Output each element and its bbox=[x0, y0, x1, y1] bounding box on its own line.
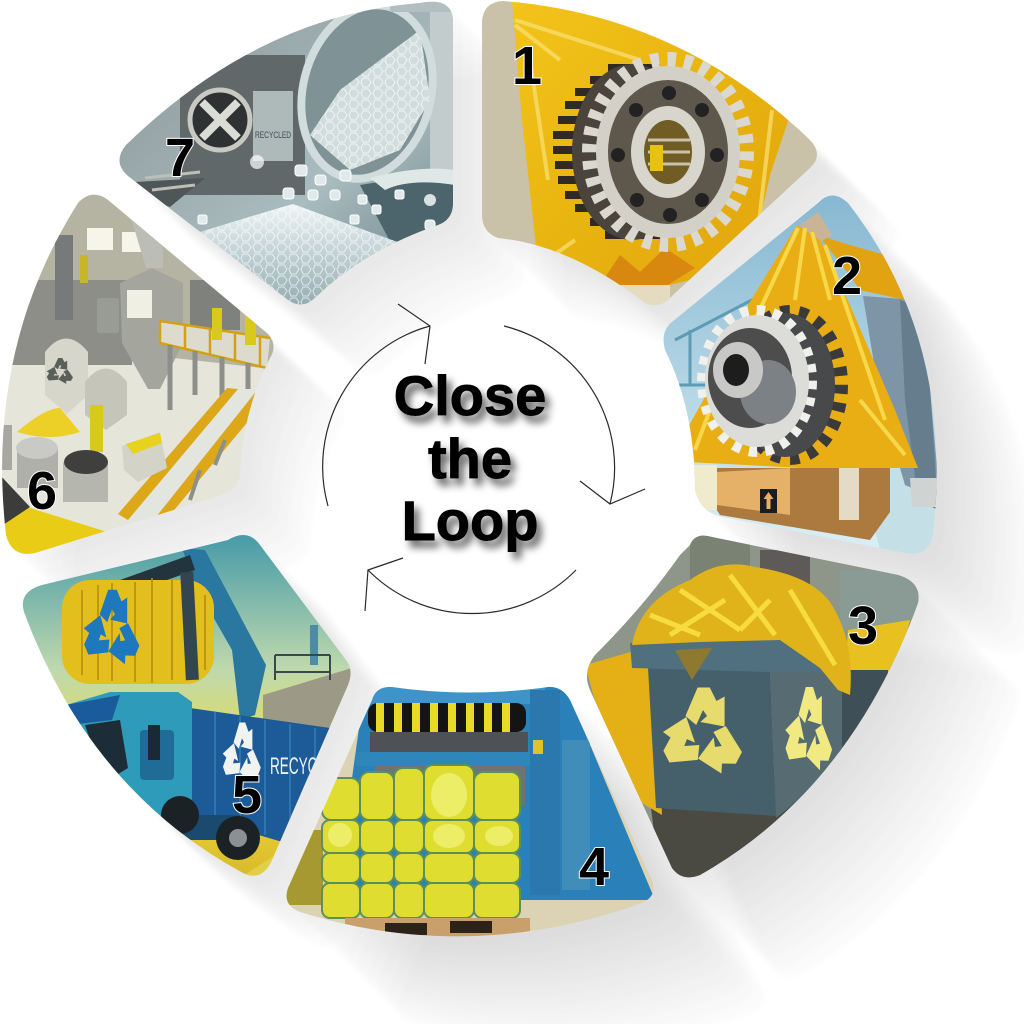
right dark area under jar bbox=[360, 170, 455, 260]
pallet bbox=[345, 918, 530, 936]
segment 2: worker wrapping gear bbox=[660, 190, 950, 560]
wheel bbox=[190, 90, 250, 150]
pellet pile bbox=[200, 204, 420, 310]
yellow bag bbox=[682, 225, 918, 468]
worker jacket bbox=[822, 238, 904, 300]
gear bbox=[740, 313, 840, 457]
striped roller bbox=[368, 703, 526, 732]
factory bbox=[263, 668, 352, 780]
segment 5: crane and recycling truck bbox=[15, 530, 360, 882]
step numbers: 6 bbox=[27, 461, 57, 521]
gear dark back teeth bbox=[553, 68, 660, 235]
title: Close the Loop bbox=[394, 364, 546, 552]
chute conveyor bbox=[246, 389, 250, 395]
step numbers: 5 bbox=[232, 765, 262, 825]
cycle arrow: bottom bbox=[365, 558, 576, 614]
box and pallet bbox=[690, 468, 890, 540]
title: Close the Loop: the bbox=[428, 427, 512, 490]
segment 7: recycled plastic pellets: RECYCLED bbox=[255, 130, 291, 140]
cycle arrow: left bbox=[323, 304, 430, 506]
falling pellets bbox=[198, 165, 435, 230]
step numbers: 1 bbox=[512, 36, 542, 96]
dark base under the bin bbox=[651, 766, 828, 878]
yellow tray bbox=[4, 508, 106, 554]
bag pile bbox=[632, 564, 851, 695]
right silo bbox=[85, 368, 127, 430]
segment 7: recycled plastic pellets bbox=[115, 0, 460, 310]
step numbers: 3 bbox=[848, 596, 878, 656]
yellow pile bbox=[17, 408, 80, 437]
trailer bbox=[190, 708, 330, 850]
truck cab bbox=[66, 692, 192, 840]
step numbers bbox=[27, 36, 878, 897]
crane arm bbox=[182, 548, 266, 720]
segment 1: gear in yellow bag bbox=[480, 0, 825, 310]
recycle icons bbox=[663, 688, 742, 774]
segment 3: recycling bin with yellow bags bbox=[580, 530, 925, 880]
left silo bbox=[45, 338, 88, 414]
truck text: RECYCL bbox=[270, 753, 325, 780]
yellow bale bbox=[62, 580, 214, 684]
side bags bbox=[585, 645, 662, 815]
segment 4: baler machine and bale bbox=[286, 686, 654, 936]
jar bbox=[284, 0, 450, 193]
bale stack bbox=[322, 765, 520, 918]
title: Close the Loop: Close bbox=[394, 364, 546, 427]
cycle arrow: right bbox=[504, 326, 645, 504]
machinery mass bbox=[12, 280, 132, 365]
step numbers: 7 bbox=[165, 128, 195, 188]
sign bbox=[253, 91, 293, 161]
bin bbox=[648, 668, 776, 816]
bin with yellow bbox=[122, 432, 167, 482]
title: Close the Loop: Loop bbox=[402, 489, 538, 552]
back wall bbox=[10, 190, 280, 370]
gear silver teeth bbox=[590, 60, 746, 244]
workers bbox=[212, 308, 222, 340]
worker trousers bbox=[863, 296, 940, 500]
drums bbox=[17, 448, 58, 488]
step numbers: 4 bbox=[579, 837, 609, 897]
platform with railing bbox=[160, 321, 270, 368]
step numbers: 2 bbox=[832, 246, 862, 306]
segment 6: processing plant bbox=[0, 190, 280, 560]
